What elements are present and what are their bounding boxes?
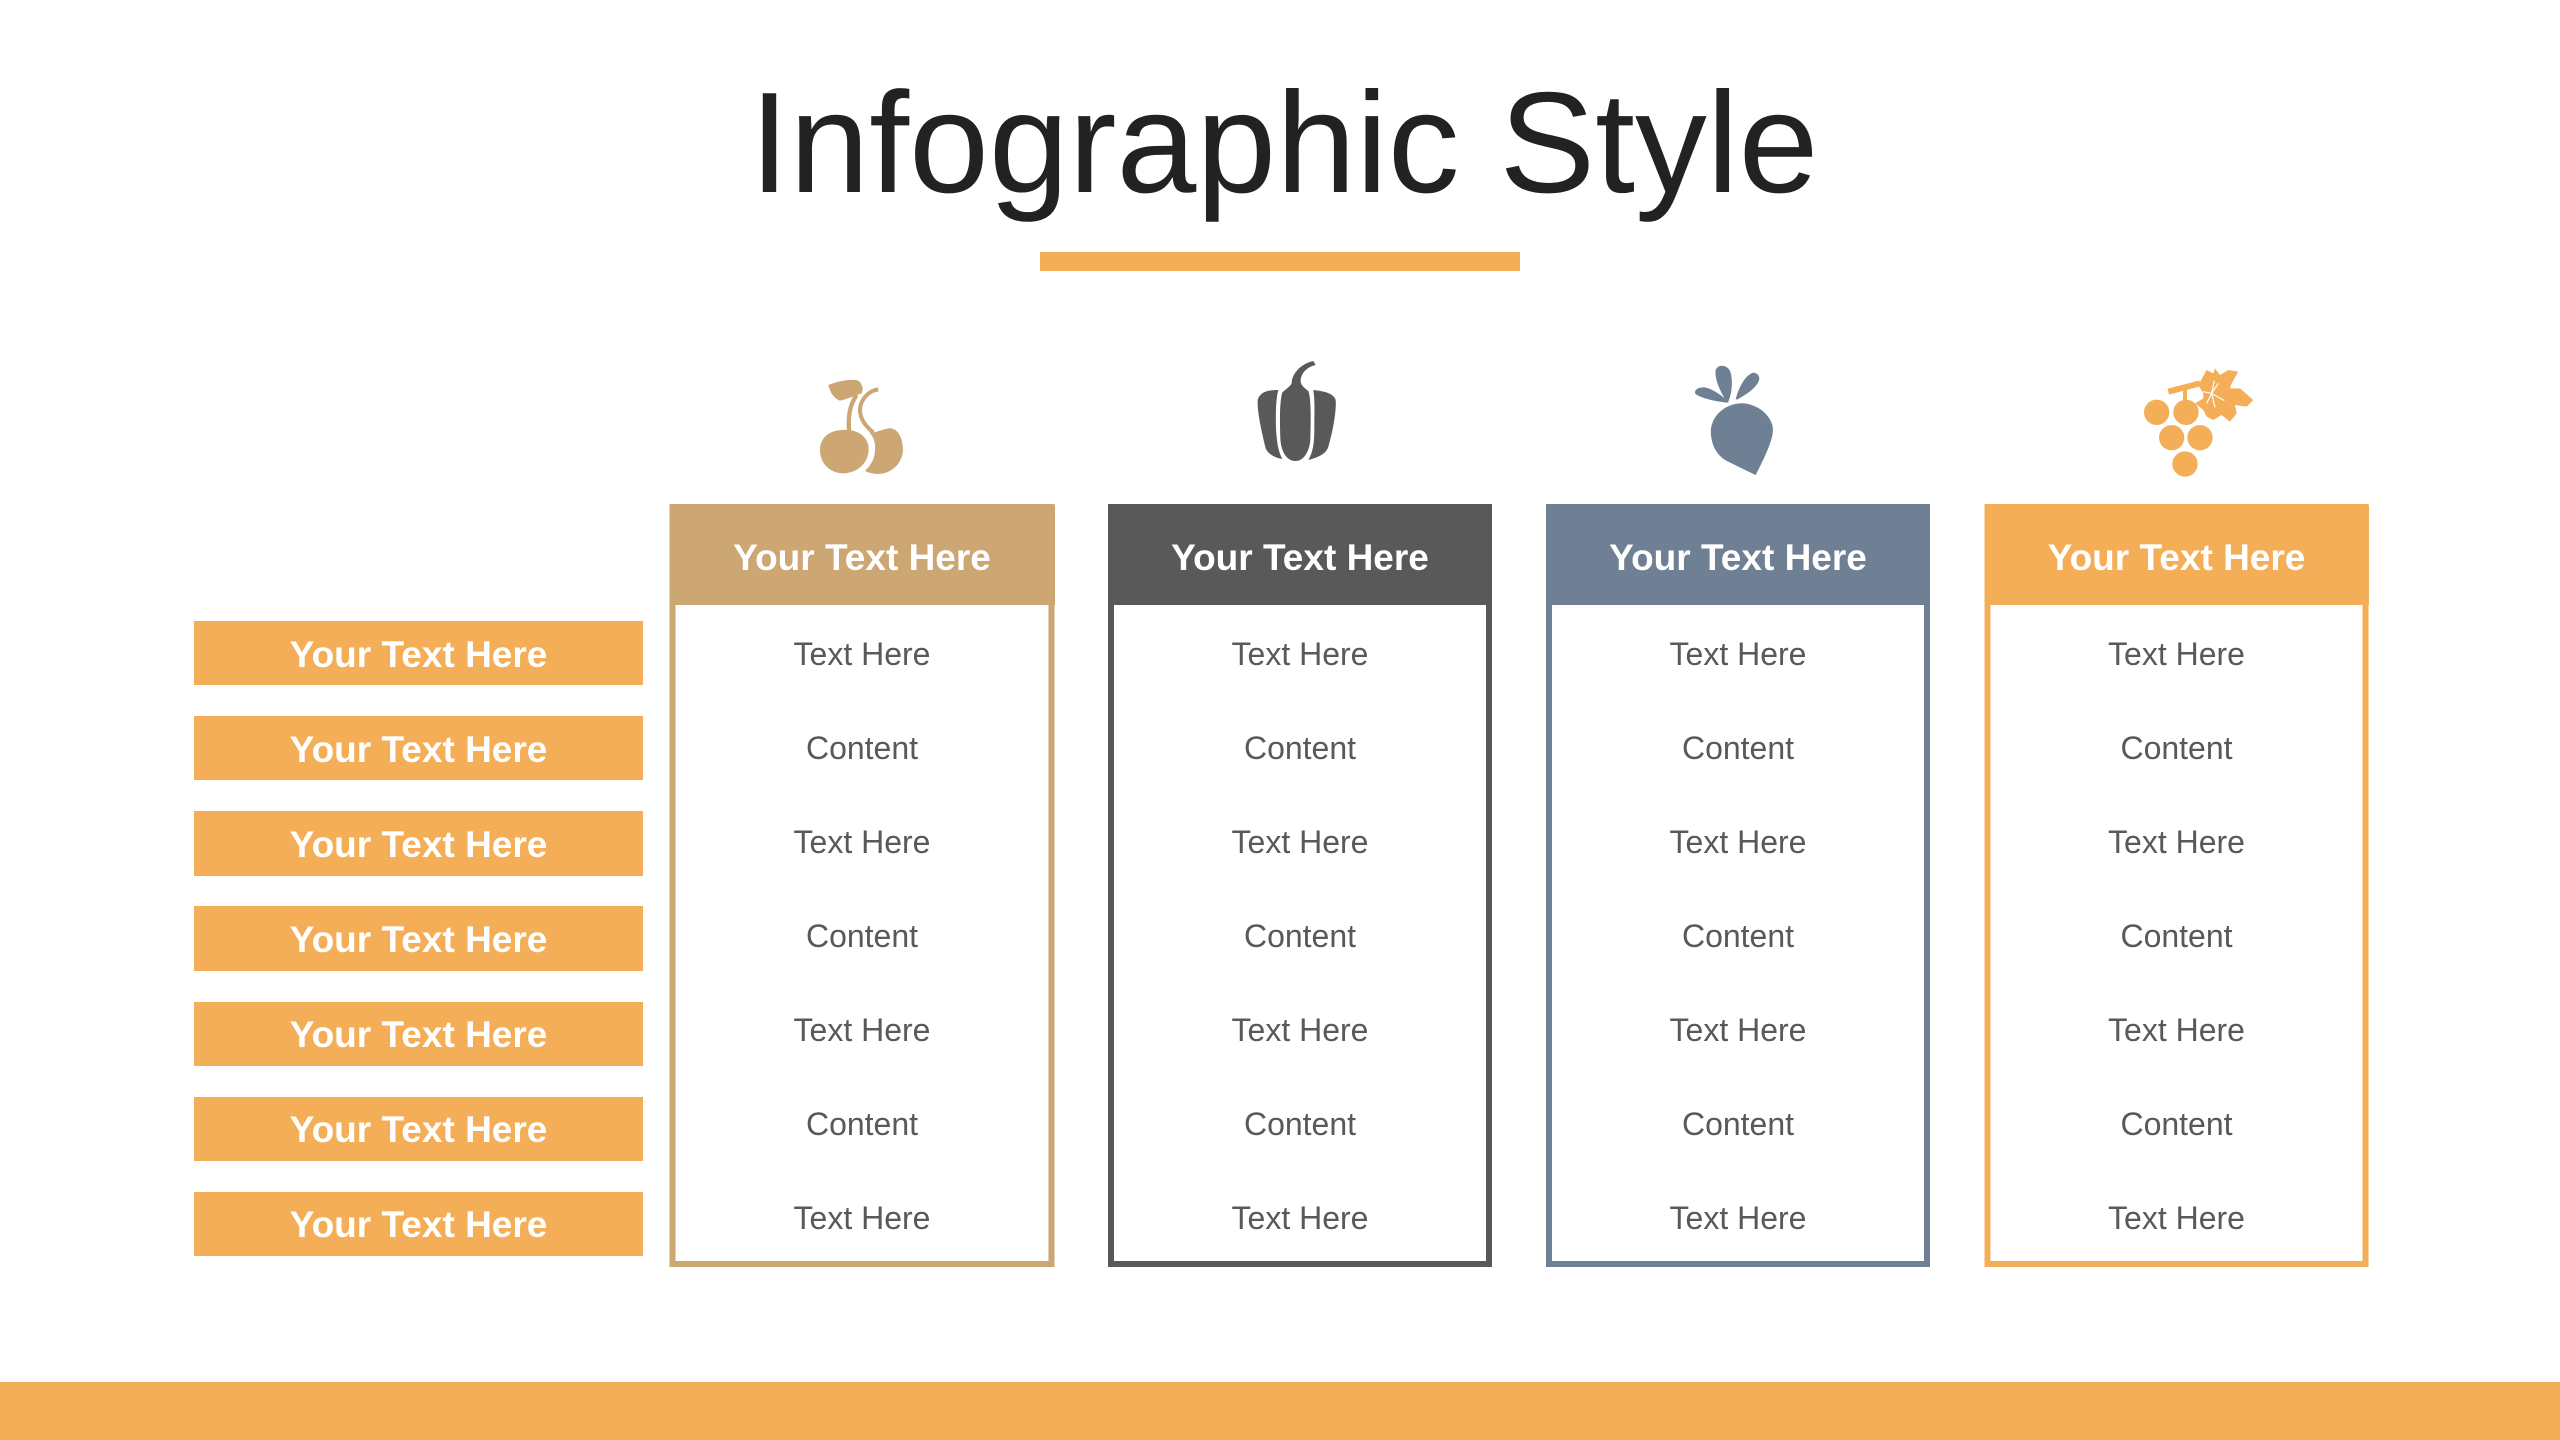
column 1 cells: Text Here	[794, 1200, 930, 1236]
title: Infographic Style	[750, 63, 1818, 223]
column 3 cells: Text Here	[1670, 636, 1806, 672]
column 4 cells: Content	[2120, 918, 2233, 954]
column 2 frame	[1111, 507, 1489, 1264]
column 2 cells: Content	[1244, 1106, 1356, 1142]
column 1 cells: Content	[806, 918, 918, 954]
column 3 cells: Content	[1682, 730, 1794, 766]
column 4	[1985, 505, 2369, 1264]
column 2 header	[1108, 505, 1492, 605]
row label 7: Your Text Here	[290, 1204, 547, 1245]
column 4 cells: Text Here	[2108, 824, 2245, 860]
column 1 cells: Content	[806, 730, 918, 766]
column 1 cells: Content	[806, 1106, 918, 1142]
row label 2	[194, 716, 643, 780]
column 3 header	[1546, 505, 1930, 605]
icon: grapes	[2144, 368, 2253, 477]
column 4 header	[1985, 505, 2369, 605]
column 4 cells: Content	[2120, 1106, 2233, 1142]
column 2 cells: Text Here	[1232, 824, 1368, 860]
row label 6	[194, 1097, 643, 1161]
column 4 cells: Text Here	[2108, 1012, 2245, 1048]
column 3 frame	[1549, 507, 1927, 1264]
column 1 cells: Text Here	[794, 1012, 930, 1048]
column 2 cells: Text Here	[1232, 1012, 1368, 1048]
column 4 cells: Content	[2120, 730, 2233, 766]
column 2 cells: Content	[1244, 918, 1356, 954]
column 2 heading: Your Text Here	[1171, 537, 1429, 578]
footer bar	[0, 1382, 2560, 1440]
column 2 cells: Text Here	[1232, 1200, 1368, 1236]
column 2 cells: Text Here	[1232, 636, 1368, 672]
column 1 cells	[794, 636, 930, 1236]
column 4 heading: Your Text Here	[2048, 537, 2305, 578]
row label 2: Your Text Here	[290, 729, 547, 770]
column 3 cells: Content	[1682, 1106, 1794, 1142]
column 2 cells	[1232, 636, 1368, 1236]
column 3 cells: Text Here	[1670, 1012, 1806, 1048]
row label 5: Your Text Here	[290, 1014, 547, 1055]
column 1 frame	[672, 507, 1052, 1264]
row label 5	[194, 1002, 643, 1066]
column 3	[1546, 505, 1930, 1264]
column 2 cells: Content	[1244, 730, 1356, 766]
row label 4	[194, 906, 643, 971]
column 4 cells: Text Here	[2108, 636, 2245, 672]
column 3 heading: Your Text Here	[1609, 537, 1867, 578]
column 3 cells: Text Here	[1670, 1200, 1806, 1236]
column 3 cells	[1670, 636, 1806, 1236]
column 4 cells: Text Here	[2108, 1200, 2245, 1236]
column 1 heading: Your Text Here	[733, 537, 991, 578]
column 2	[1108, 505, 1492, 1264]
column 3 cells: Content	[1682, 918, 1794, 954]
column 1 cells: Text Here	[794, 824, 930, 860]
row label 3: Your Text Here	[290, 824, 547, 865]
icon: beetroot	[1695, 366, 1773, 475]
column 3 cells: Text Here	[1670, 824, 1806, 860]
column 1	[670, 505, 1055, 1264]
icon: bell pepper	[1258, 361, 1336, 461]
row label 1	[194, 621, 643, 685]
column 4 cells	[2108, 636, 2245, 1236]
icon: cherries	[820, 380, 903, 474]
column 1 header	[670, 505, 1055, 605]
column 4 frame	[1988, 507, 2366, 1264]
row label 1: Your Text Here	[290, 634, 547, 675]
title underline	[1040, 252, 1520, 271]
row label 4: Your Text Here	[290, 919, 547, 960]
row label 3	[194, 811, 643, 876]
row label 6: Your Text Here	[290, 1109, 547, 1150]
row labels	[194, 621, 643, 1256]
row label 7	[194, 1192, 643, 1256]
column 1 cells: Text Here	[794, 636, 930, 672]
